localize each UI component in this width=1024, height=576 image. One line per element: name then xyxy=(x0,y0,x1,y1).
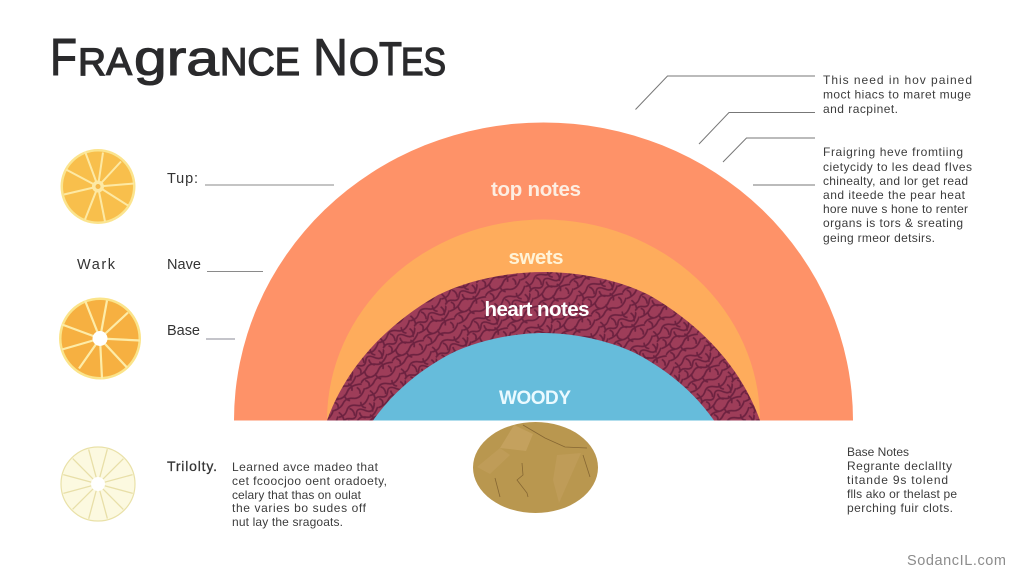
text block: top right: This need in hov pained xyxy=(823,73,972,87)
label: swets: swets xyxy=(508,246,564,269)
label: Base: Base xyxy=(167,323,200,339)
text block: base notes xyxy=(847,445,957,515)
layer: top notes xyxy=(234,122,853,420)
callout line 1 xyxy=(636,76,815,110)
icon: pale citrus slice xyxy=(54,440,142,528)
label: Nave: Nave xyxy=(167,257,201,273)
icon: citrus slice middle xyxy=(59,298,141,380)
title: gra xyxy=(134,32,220,86)
text block: base notes: flls ako or thelast pe xyxy=(847,487,957,501)
text block: middle right: chinealty, and lor get read xyxy=(823,174,968,188)
text block: base notes: Base Notes xyxy=(847,445,909,459)
icon: sandalwood stone xyxy=(473,422,598,513)
title: NCE xyxy=(220,41,300,84)
text block: left description: Learned avce madeo that xyxy=(232,460,379,474)
text block: middle right: Fraigring heve fromtiing xyxy=(823,145,963,159)
callout line 2 xyxy=(699,112,815,144)
text block: left description xyxy=(232,460,387,529)
title: N xyxy=(313,29,348,87)
text block: top right xyxy=(823,73,972,116)
label: woody: WOODY xyxy=(499,388,571,409)
text block: left description: nut lay the sragoats. xyxy=(232,515,343,529)
title: RA xyxy=(78,41,132,84)
icon: citrus slice top xyxy=(60,149,136,224)
callout line 3 xyxy=(723,138,815,162)
text block: base notes: titande 9s tolend xyxy=(847,473,948,487)
watermark: SodancIL.com xyxy=(907,553,1006,569)
text block: middle right: geing rmeor detsirs. xyxy=(823,231,935,245)
leader line: Tup xyxy=(205,184,334,186)
layer: sweets xyxy=(327,220,760,420)
text block: top right: moct hiacs to maret muge xyxy=(823,88,971,102)
layered dome diagram xyxy=(234,122,853,420)
text block: base notes: Regrante declalIty xyxy=(847,459,952,473)
callout line 4 xyxy=(753,184,815,186)
callout lines xyxy=(636,76,815,185)
text block: middle right: and iteede the pear heat xyxy=(823,188,966,202)
text block: base notes: perching fuir clots. xyxy=(847,501,953,515)
text block: left description: the varies bo sudes off xyxy=(232,501,367,515)
label: Trilolty: Trilolty. xyxy=(167,458,217,474)
text block: middle right: cietycidy to les dead fIves xyxy=(823,160,972,174)
layer: heart notes xyxy=(327,272,760,420)
text block: middle right: organs is tors & sreating xyxy=(823,216,963,230)
title: F xyxy=(50,29,77,87)
title: O xyxy=(349,41,379,84)
text block: middle right xyxy=(823,145,972,245)
layer: woody xyxy=(373,333,714,420)
text block: middle right: hore nuve s hone to renter xyxy=(823,202,968,216)
leader line: Base xyxy=(206,338,235,340)
text block: top right: and racpinet. xyxy=(823,102,898,116)
leader line: Nave xyxy=(207,270,263,272)
title xyxy=(50,29,446,87)
title: ES xyxy=(401,41,446,84)
text block: left description: celary that thas on oulat xyxy=(232,488,362,502)
label: Wark: Wark xyxy=(77,257,116,273)
label: top notes: top notes xyxy=(491,178,581,201)
text block: left description: cet fcoocjoo oent oradoety, xyxy=(232,474,387,488)
label: heart notes: heart notes xyxy=(484,298,590,321)
title: T xyxy=(379,32,402,85)
label: Tup: Tup: xyxy=(167,171,198,187)
